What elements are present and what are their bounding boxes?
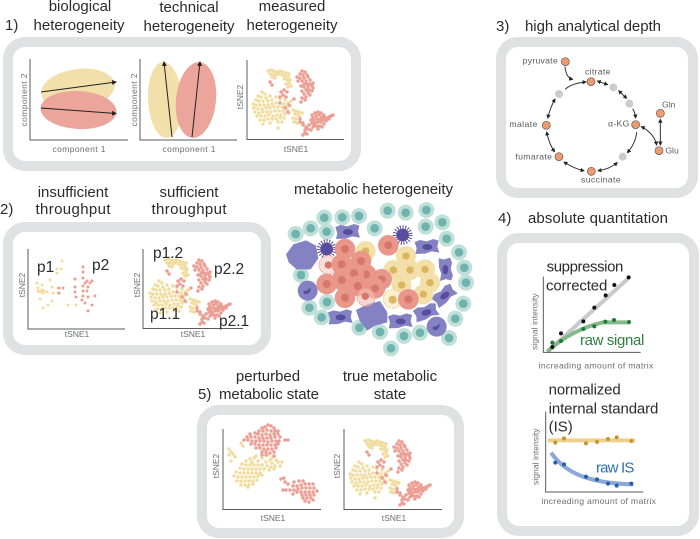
chart: normalized internal standard vs raw IS: signal intensity <box>531 428 541 485</box>
pathway labels: pyruvate <box>523 56 558 66</box>
heading: technical heterogeneity: heterogeneity <box>144 18 235 35</box>
chart: normalized internal standard vs raw IS: internal standard <box>549 400 658 417</box>
plot: technical heterogeneity <box>129 59 237 154</box>
chart: suppression corrected vs raw signal: suppression <box>547 259 623 276</box>
heading: biological heterogeneity <box>34 0 125 34</box>
pathway labels <box>509 56 679 184</box>
heading: true metabolic state: state <box>374 386 406 403</box>
plot: technical heterogeneity: component 2 <box>129 73 139 126</box>
heading: true metabolic state <box>343 368 438 403</box>
heading: panel 1 number: 1) <box>5 17 18 34</box>
pathway labels: malate <box>509 119 538 129</box>
plot: sufficient throughput tSNE with subpopulations: tSNE1 <box>181 329 206 339</box>
plot: biological heterogeneity <box>19 59 128 154</box>
heading: panel 4 number and absolute quantitation: 4) <box>498 210 511 227</box>
pathway arrows <box>547 67 660 171</box>
plot: sufficient throughput tSNE with subpopulations: p1.2 <box>153 245 183 262</box>
plot: sufficient throughput tSNE with subpopulations: tSNE2 <box>132 272 142 297</box>
plot: biological heterogeneity: component 2 <box>19 73 29 126</box>
heading: insufficient throughput <box>36 184 111 218</box>
plot: perturbed metabolic state tSNE: tSNE2 <box>211 453 221 478</box>
pathway labels: succinate <box>581 174 621 184</box>
plot: technical heterogeneity: component 1 <box>162 144 216 154</box>
illustration: cell population <box>286 202 474 356</box>
pathway intermediate nodes <box>555 83 633 161</box>
plot: true metabolic state tSNE: tSNE1 <box>382 513 407 523</box>
chart: normalized internal standard vs raw IS: (IS) <box>549 419 573 436</box>
plot: true metabolic state tSNE: tSNE2 <box>332 453 342 478</box>
chart: suppression corrected vs raw signal: increading amount of matrix <box>539 361 654 371</box>
plot: insufficient throughput scatter <box>17 249 125 339</box>
heading: biological heterogeneity: heterogeneity <box>34 17 125 34</box>
chart: suppression corrected vs raw signal <box>529 259 654 371</box>
panel 5: metabolic state plots <box>202 410 459 533</box>
plot: biological heterogeneity: component 1 <box>52 144 106 154</box>
panel 3: metabolic pathway <box>501 42 693 193</box>
plot: sufficient throughput tSNE with subpopulations <box>132 245 249 339</box>
plot: true metabolic state tSNE <box>332 429 442 523</box>
heading: measured heterogeneity: heterogeneity <box>246 17 338 34</box>
pathway labels: Glu <box>665 145 679 155</box>
pathway labels: citrate <box>585 67 611 77</box>
chart: normalized internal standard vs raw IS: raw IS <box>596 459 634 476</box>
heading: perturbed metabolic state: perturbed <box>236 368 300 385</box>
heading: perturbed metabolic state <box>219 368 319 403</box>
heading: sufficient throughput <box>152 184 227 218</box>
panel 2: throughput plots <box>8 227 266 350</box>
plot: perturbed metabolic state tSNE <box>211 425 321 523</box>
heading: panel 5 number: 5) <box>198 386 211 403</box>
panel 1: heterogeneity plots <box>8 42 356 166</box>
heading: panel 3 number and high analytical depth: high analytical depth <box>525 18 661 35</box>
plot: sufficient throughput tSNE with subpopulations: p2.2 <box>214 261 244 278</box>
pathway labels: α-KG <box>608 119 630 129</box>
heading: panel 2 number: 2) <box>0 201 13 218</box>
plot: perturbed metabolic state tSNE: tSNE1 <box>261 513 286 523</box>
chart: suppression corrected vs raw signal: signal intensity <box>529 293 539 350</box>
heading: insufficient throughput: throughput <box>36 201 111 218</box>
heading: metabolic heterogeneity: metabolic heterogeneity <box>294 181 454 198</box>
plot: sufficient throughput tSNE with subpopulations: p2.1 <box>219 313 249 330</box>
heading: measured heterogeneity <box>246 0 338 34</box>
plot: measured heterogeneity tSNE: tSNE1 <box>284 144 309 154</box>
heading: sufficient throughput: throughput <box>152 201 227 218</box>
heading: insufficient throughput: insufficient <box>38 184 109 201</box>
chart: normalized internal standard vs raw IS: increading amount of matrix <box>541 496 657 506</box>
panel 4: absolute quantitation charts <box>502 238 694 531</box>
heading: technical heterogeneity <box>144 0 235 35</box>
plot: sufficient throughput tSNE with subpopulations: p1.1 <box>150 306 180 323</box>
pathway labels: Gln <box>662 99 676 109</box>
plot: measured heterogeneity tSNE <box>235 60 344 154</box>
chart: suppression corrected vs raw signal: raw signal <box>580 332 644 349</box>
plot: insufficient throughput scatter: tSNE1 <box>65 329 90 339</box>
pathway labels: fumarate <box>515 151 552 161</box>
heading: panel 3 number and high analytical depth: 3) <box>496 18 509 35</box>
heading: panel 4 number and absolute quantitation: absolute quantitation <box>528 210 668 227</box>
plot: measured heterogeneity tSNE: tSNE2 <box>235 84 245 109</box>
chart: normalized internal standard vs raw IS <box>531 381 658 506</box>
chart: normalized internal standard vs raw IS: normalized <box>549 381 621 398</box>
heading: true metabolic state: true metabolic <box>343 368 438 385</box>
heading: sufficient throughput: sufficient <box>160 184 219 201</box>
plot: insufficient throughput scatter: p2 <box>92 257 109 274</box>
heading: perturbed metabolic state: metabolic state <box>219 386 319 403</box>
plot: insufficient throughput scatter: tSNE2 <box>17 272 27 297</box>
chart: suppression corrected vs raw signal: corrected <box>546 278 607 295</box>
pathway metabolite nodes <box>542 58 664 175</box>
plot: insufficient throughput scatter: p1 <box>37 259 54 276</box>
